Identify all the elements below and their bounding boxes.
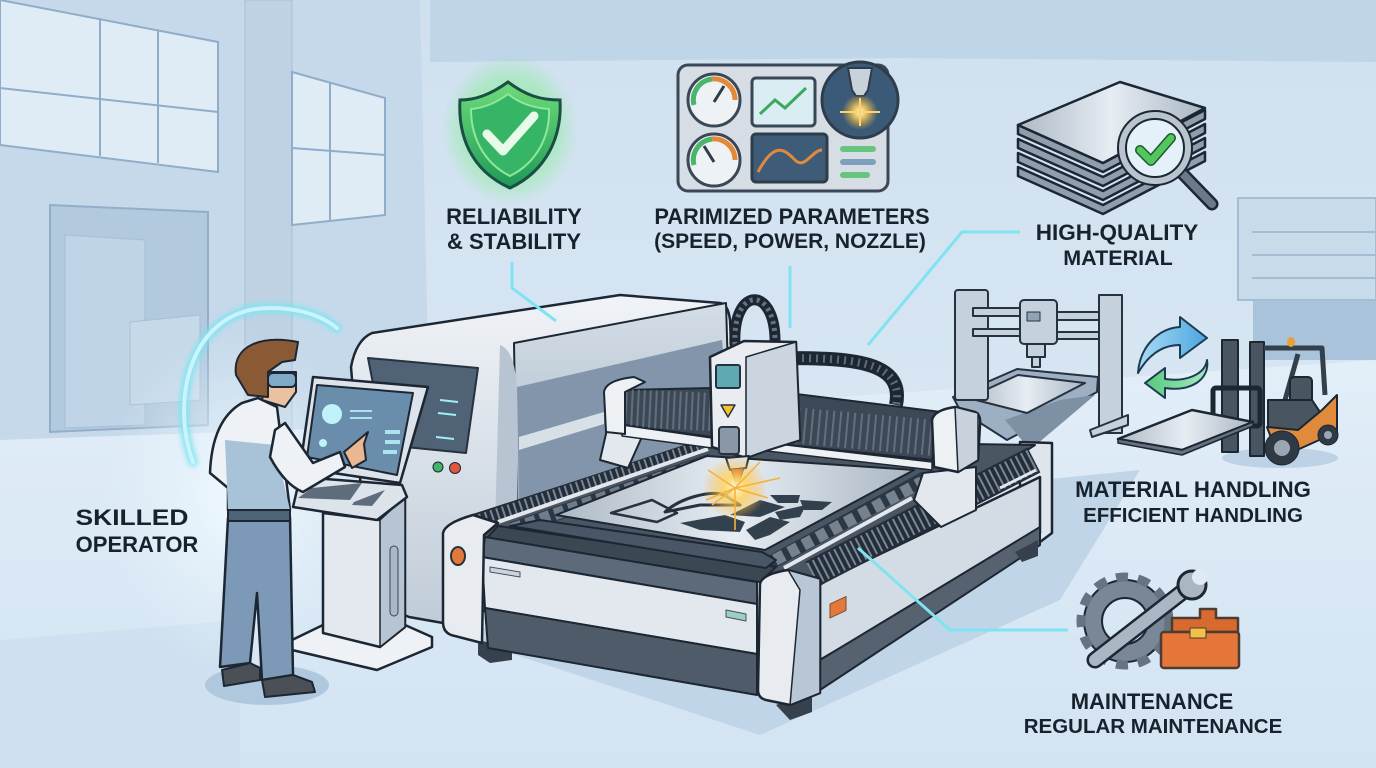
text: high-quality material: HIGH-QUALITY — [1036, 220, 1198, 245]
icon: reliability shield — [442, 55, 578, 205]
panel: gantry loading machine — [953, 290, 1128, 450]
text: reliability and stability: RELIABILITY — [446, 204, 582, 229]
arc: operator glow — [184, 308, 337, 462]
front-right post — [758, 570, 820, 705]
horizontal drag chain — [781, 358, 897, 405]
text: & STABILITY — [447, 229, 581, 254]
operator arm — [270, 423, 345, 492]
left leg — [600, 425, 645, 468]
connector lines — [512, 232, 1068, 630]
icon: material stack with magnifier — [1018, 82, 1212, 214]
text: (SPEED, POWER, NOZZLE) — [654, 230, 926, 253]
bed top — [473, 440, 1035, 585]
icon: parameter dashboard — [678, 62, 898, 191]
operator legs — [220, 517, 293, 680]
windows — [0, 0, 385, 225]
operator head — [262, 372, 296, 407]
panel: gantry with laser head — [600, 300, 980, 530]
text: optimized parameters: PARIMIZED PARAMETERS — [654, 204, 930, 229]
text: material handling: MATERIAL HANDLING — [1075, 477, 1311, 502]
vertical drag chain — [735, 300, 775, 345]
front-left post — [443, 515, 498, 643]
panel: operator console — [292, 377, 432, 670]
text: maintenance: MAINTENANCE — [1071, 689, 1233, 714]
icon: forklift — [1118, 337, 1338, 468]
left pillar — [245, 0, 292, 436]
right side panel — [820, 477, 1040, 660]
back right post — [1020, 442, 1052, 545]
text: MATERIAL — [1063, 246, 1173, 270]
text: EFFICIENT HANDLING — [1083, 504, 1303, 527]
right roller door — [1238, 198, 1376, 300]
machine shadow on floor — [440, 470, 1140, 735]
laser head — [710, 341, 800, 458]
text: skilled operator: SKILLED — [76, 505, 188, 530]
cut sheet — [556, 456, 914, 550]
panel: laser cutting bed — [443, 440, 1052, 720]
icon: gear and wrench with toolbox — [1081, 569, 1239, 668]
operator torso — [210, 398, 290, 510]
text: REGULAR MAINTENANCE — [1024, 715, 1282, 738]
icon: cycle arrows — [1138, 317, 1207, 398]
panel: machine enclosure — [351, 295, 735, 623]
panel: skilled operator — [205, 340, 368, 705]
text: OPERATOR — [76, 532, 198, 557]
left doorway — [50, 205, 208, 432]
right leg — [914, 467, 976, 527]
front fascia — [482, 537, 757, 604]
front slats — [485, 526, 776, 582]
